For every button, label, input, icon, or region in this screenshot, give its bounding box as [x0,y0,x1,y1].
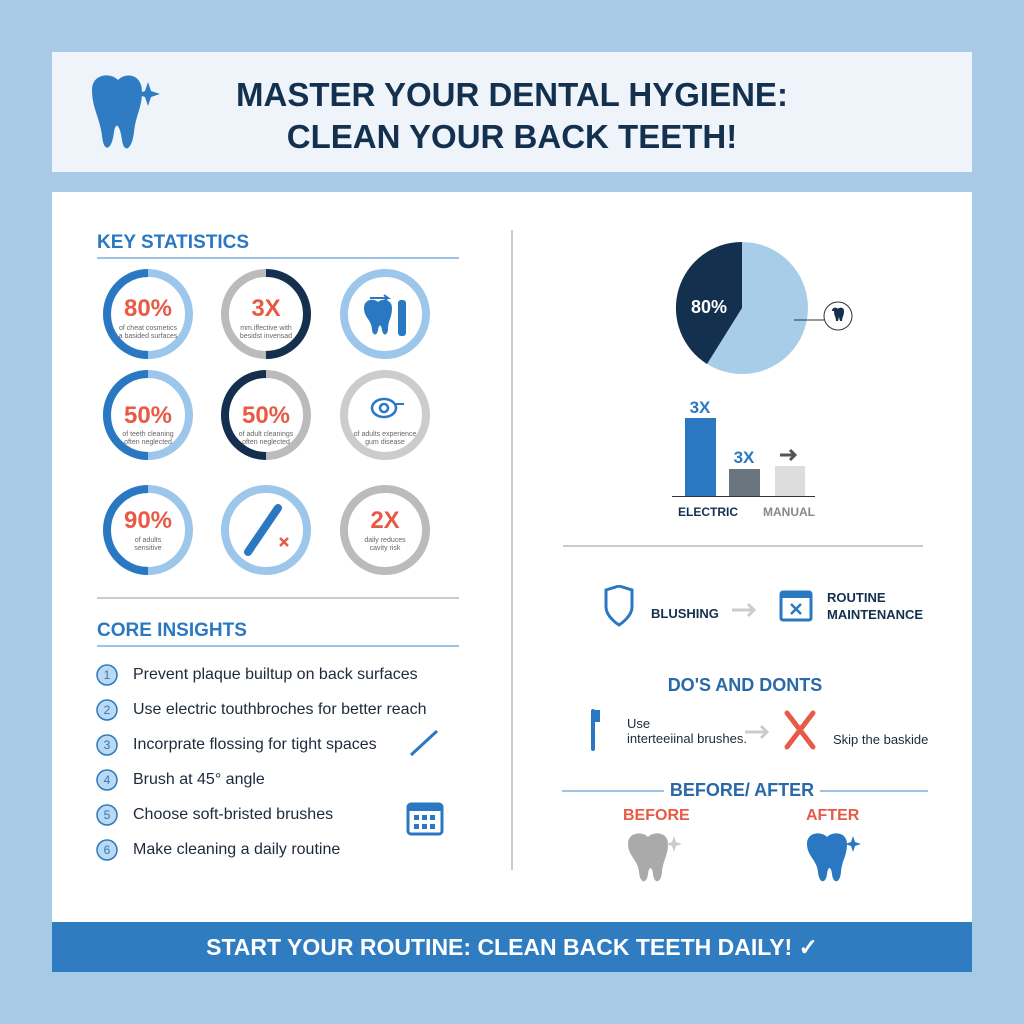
insights list: Incorprate flossing for tight spaces [133,736,377,753]
stat 90% [107,489,189,571]
stat 2X [344,489,426,571]
stat 90%: of adults [135,537,162,544]
stat 50%: of teeth cleaning [122,431,174,438]
insights list: 1 [104,668,111,682]
insights list: 3 [104,738,111,752]
insights list: 2 [104,703,111,717]
do's and donts row: Use [627,716,650,731]
bar chart [672,398,815,519]
stat 50% [107,374,189,456]
flow: blushing to routine maintenance [604,585,923,627]
stat 80%: of cheat cosmetics [119,325,177,332]
before after comparison [623,807,861,882]
stat 50% b [225,374,307,456]
stats grid [103,269,430,575]
bar chart: MANUAL [763,505,815,519]
stat 50% b: of adult cleanings [239,431,294,438]
stat 3X: 3X [251,295,281,322]
icon stat: floss: of adults experience [354,431,416,438]
stat 80%: a basided surfaces [119,333,178,340]
stat 80%: 80% [124,295,172,322]
stat 50%: 50% [124,402,172,429]
stat 2X: cavity risk [370,545,401,552]
stat 2X: 2X [370,507,400,534]
icon: floss pick [410,730,438,756]
insights list [96,664,444,861]
do's and donts row: Skip the baskide [833,732,928,747]
stat 3X: mm.iffective with [240,325,292,332]
main panel [52,192,972,922]
stat 50% b: often neglected [242,439,290,446]
icon stat: floss [344,374,426,456]
before after comparison: BEFORE [623,807,690,824]
insights list: Make cleaning a daily routine [133,841,340,858]
heading: core insights: CORE INSIGHTS [97,620,247,641]
do's and donts row [591,709,928,751]
bar chart: ELECTRIC [678,505,738,519]
title: CLEAN YOUR BACK TEETH! [287,118,737,155]
insights list: 6 [104,843,111,857]
insights list: Brush at 45° angle [133,771,265,788]
stat 90%: sensitive [134,545,162,552]
flow: blushing to routine maintenance: MAINTENANCE [827,607,923,622]
stat 3X [225,273,307,355]
title [236,76,788,155]
insights list: 5 [104,808,111,822]
icon stat: brush with x [225,489,307,571]
footer banner [52,922,972,972]
stat 90%: 90% [124,507,172,534]
flow: blushing to routine maintenance: ROUTINE [827,590,886,605]
pie chart [676,242,852,374]
icon: tooth logo [92,75,160,148]
pie chart: 80% [691,297,727,317]
insights list: 4 [104,773,111,787]
stat 3X: besidst invensad [240,333,292,340]
footer banner: START YOUR ROUTINE: CLEAN BACK TEETH DAILY! ✓ [206,934,818,960]
title: MASTER YOUR DENTAL HYGIENE: [236,76,788,113]
stat 50%: often neglected [124,439,172,446]
stat 80% [107,273,189,355]
bar chart: 3X [734,448,755,467]
before after comparison: AFTER [806,807,859,824]
divider [511,230,513,870]
icon: calendar [406,802,444,836]
heading: before/after: BEFORE/ AFTER [670,780,814,800]
insights list: Choose soft-bristed brushes [133,806,333,823]
heading: do's and donts: DO'S AND DONTS [668,675,822,695]
icon stat: tooth and brush [344,273,426,355]
heading: key statistics: KEY STATISTICS [97,232,249,253]
bar chart: 3X [690,398,711,417]
insights list: Use electric touthbroches for better reach [133,701,426,718]
stat 2X: daily reduces [364,537,406,544]
insights list: Prevent plaque builtup on back surfaces [133,666,418,683]
icon stat: floss: gum disease [365,439,405,446]
header panel [52,52,972,172]
stat 50% b: 50% [242,402,290,429]
flow: blushing to routine maintenance: BLUSHING [651,606,719,621]
do's and donts row: interteeiinal brushes. [627,731,747,746]
